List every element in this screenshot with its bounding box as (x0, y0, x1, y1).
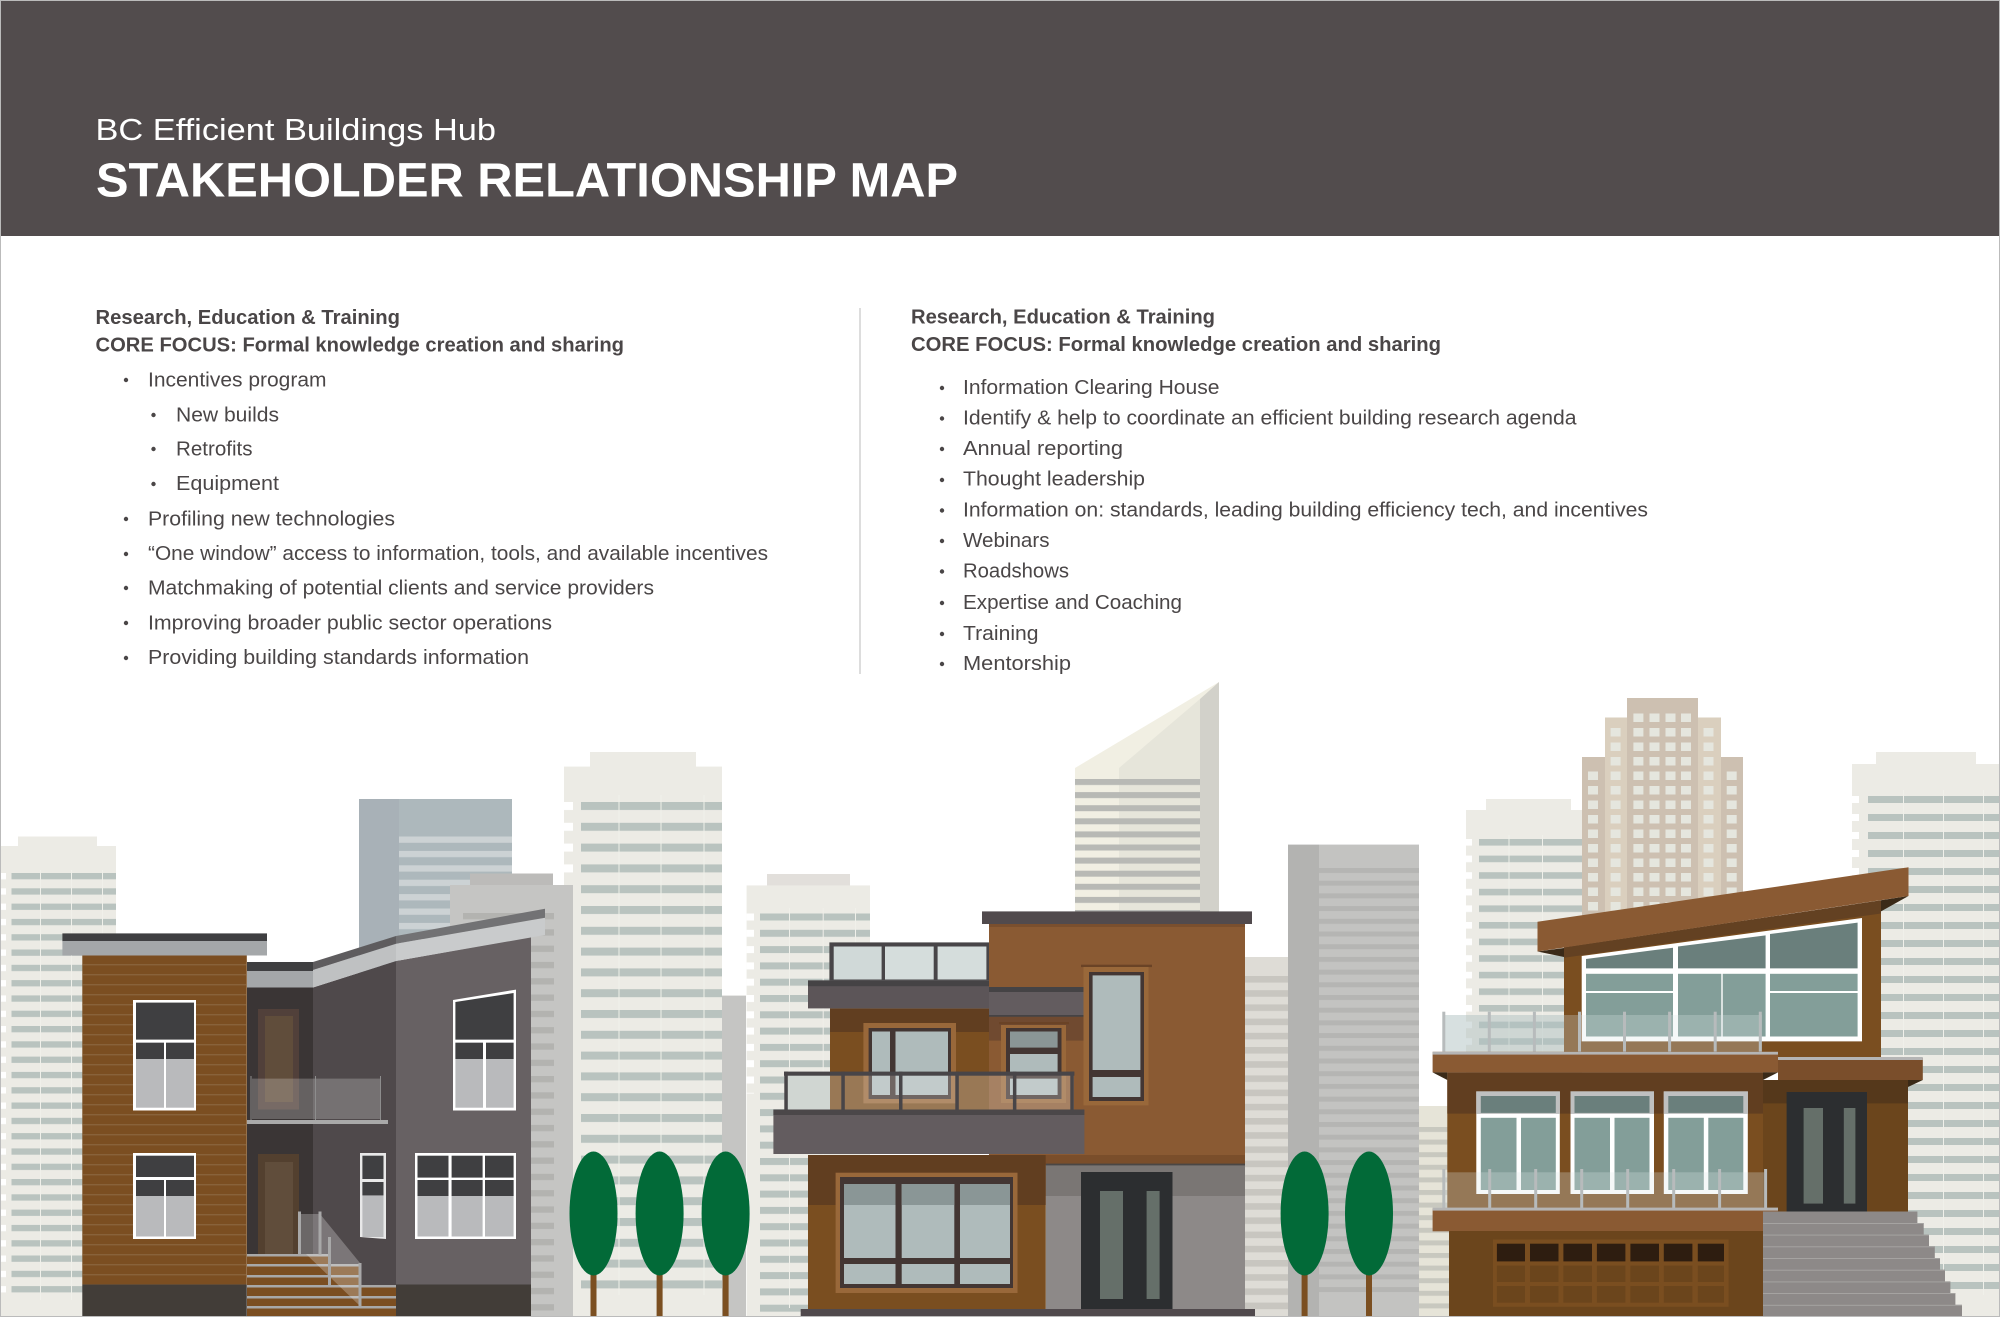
tower: beige low (1419, 1106, 1449, 1317)
right bullet list: Annual reporting (963, 437, 1123, 460)
recessed centre (247, 962, 313, 1254)
upper left block (830, 1008, 1084, 1110)
house two: brown modern (773, 911, 1255, 1317)
left bullet list: New builds (176, 403, 279, 426)
brown side window upper (133, 1000, 196, 1110)
left bullet list (124, 369, 768, 669)
rooftop railing (829, 942, 989, 980)
tower: blue-grey (359, 799, 512, 1009)
balcony slab (773, 1110, 1084, 1154)
entry door (1081, 1172, 1172, 1309)
lower glass rail (1442, 1169, 1767, 1209)
right heading: CORE FOCUS: Formal knowledge creation and sharing (911, 333, 1441, 356)
tree 2 (636, 1152, 684, 1317)
left heading: Research, Education & Training (96, 306, 400, 329)
window A (863, 1023, 956, 1103)
upper wall (1564, 905, 1881, 1060)
right bullet list: Roadshows (963, 560, 1069, 583)
tree 5 (1345, 1152, 1393, 1317)
grey wall panels (313, 937, 531, 1317)
flat roof left (62, 933, 267, 956)
title: STAKEHOLDER RELATIONSHIP MAP (96, 154, 958, 207)
left heading (96, 306, 624, 356)
right bullet list: Mentorship (963, 652, 1071, 675)
right wall with door (1763, 1080, 1908, 1212)
soffit shadow (1564, 900, 1881, 958)
right bullet list: Information on: standards, leading building efficiency tech, and incentives (963, 499, 1648, 522)
tower: grey narrow (722, 996, 746, 1317)
front stairs (247, 1254, 396, 1317)
shed roof (1538, 867, 1908, 957)
right bullet list: Identify & help to coordinate an efficient building research agenda (963, 407, 1577, 430)
door lower (258, 1154, 299, 1254)
tower: beige behind (1245, 957, 1288, 1317)
left bullet list: Profiling new technologies (148, 507, 395, 530)
house one: brown and grey duplex (62, 909, 545, 1317)
tall window C (1081, 965, 1152, 1105)
text panel: left column (96, 306, 768, 669)
grey side window upper angled (453, 990, 516, 1110)
house three: shed roof modern (1433, 867, 1962, 1317)
terrace slab (1433, 1052, 1778, 1080)
right heading: Research, Education & Training (911, 306, 1215, 329)
upper slabs (808, 980, 1084, 1017)
door upper (258, 1009, 299, 1110)
tree 4 (1281, 1152, 1329, 1317)
brown side window lower (133, 1153, 196, 1239)
subtitle: BC Efficient Buildings Hub (96, 112, 496, 147)
stair rail (298, 1212, 362, 1306)
left bullet list: Equipment (176, 472, 279, 495)
left bullet list: Improving broader public sector operations (148, 612, 552, 634)
lower left block (808, 1155, 1046, 1309)
lower slab (1433, 1208, 1778, 1231)
right bullet list: Webinars (963, 529, 1050, 552)
tree 1 (570, 1152, 618, 1317)
ground slab (801, 1309, 1255, 1317)
brown siding block (82, 955, 247, 1317)
right bullet list: Thought leadership (963, 468, 1145, 491)
trees (570, 1152, 1393, 1317)
tower: grey tall (1288, 845, 1419, 1317)
tower: far right white (1852, 752, 2000, 1317)
tree 3 (702, 1152, 750, 1317)
lower grey block (1046, 1164, 1245, 1309)
tower: grey behind house one (450, 874, 573, 1317)
tower: tall white centre-left (564, 752, 722, 1317)
tower: sail roof (1075, 682, 1219, 940)
right bullet list: Expertise and Coaching (963, 591, 1182, 614)
large window (836, 1173, 1018, 1293)
wide window (415, 1153, 516, 1239)
left bullet list: “One window” access to information, tools, and available incentives (148, 542, 768, 565)
left bullet list: Retrofits (176, 437, 252, 460)
tower: white mid (747, 874, 870, 1317)
clerestory window (1582, 918, 1862, 1041)
garage door (1493, 1240, 1729, 1307)
right bullet list (940, 376, 1648, 675)
narrow window (360, 1153, 386, 1239)
left bullet list: Incentives program (148, 369, 326, 392)
left bullet list: Matchmaking of potential clients and service providers (148, 577, 654, 600)
glass balcony (247, 1076, 388, 1124)
right canopy (1778, 1057, 1923, 1087)
terrace glass rail upper (1442, 1012, 1762, 1052)
tower: right white small (1466, 799, 1582, 1100)
upper right block (982, 911, 1252, 1165)
concrete stairs (1763, 1212, 1962, 1317)
left heading: CORE FOCUS: Formal knowledge creation and sharing (96, 334, 624, 356)
sloped roof (313, 909, 545, 988)
text panel: right column (911, 306, 1648, 675)
middle wall (1447, 1072, 1763, 1209)
tower: tan stepped (1582, 698, 1743, 958)
balcony rail (784, 1072, 1074, 1110)
header band (0, 0, 2000, 236)
left bullet list: Providing building standards information (148, 646, 529, 669)
right bullet list: Information Clearing House (963, 376, 1220, 399)
tower: far left white (0, 836, 116, 1317)
right bullet list: Training (963, 622, 1038, 645)
skyline background (0, 682, 2000, 1317)
window B (999, 1022, 1069, 1103)
three windows (1476, 1091, 1748, 1194)
garage wall (1449, 1231, 1763, 1317)
right heading (911, 306, 1441, 356)
